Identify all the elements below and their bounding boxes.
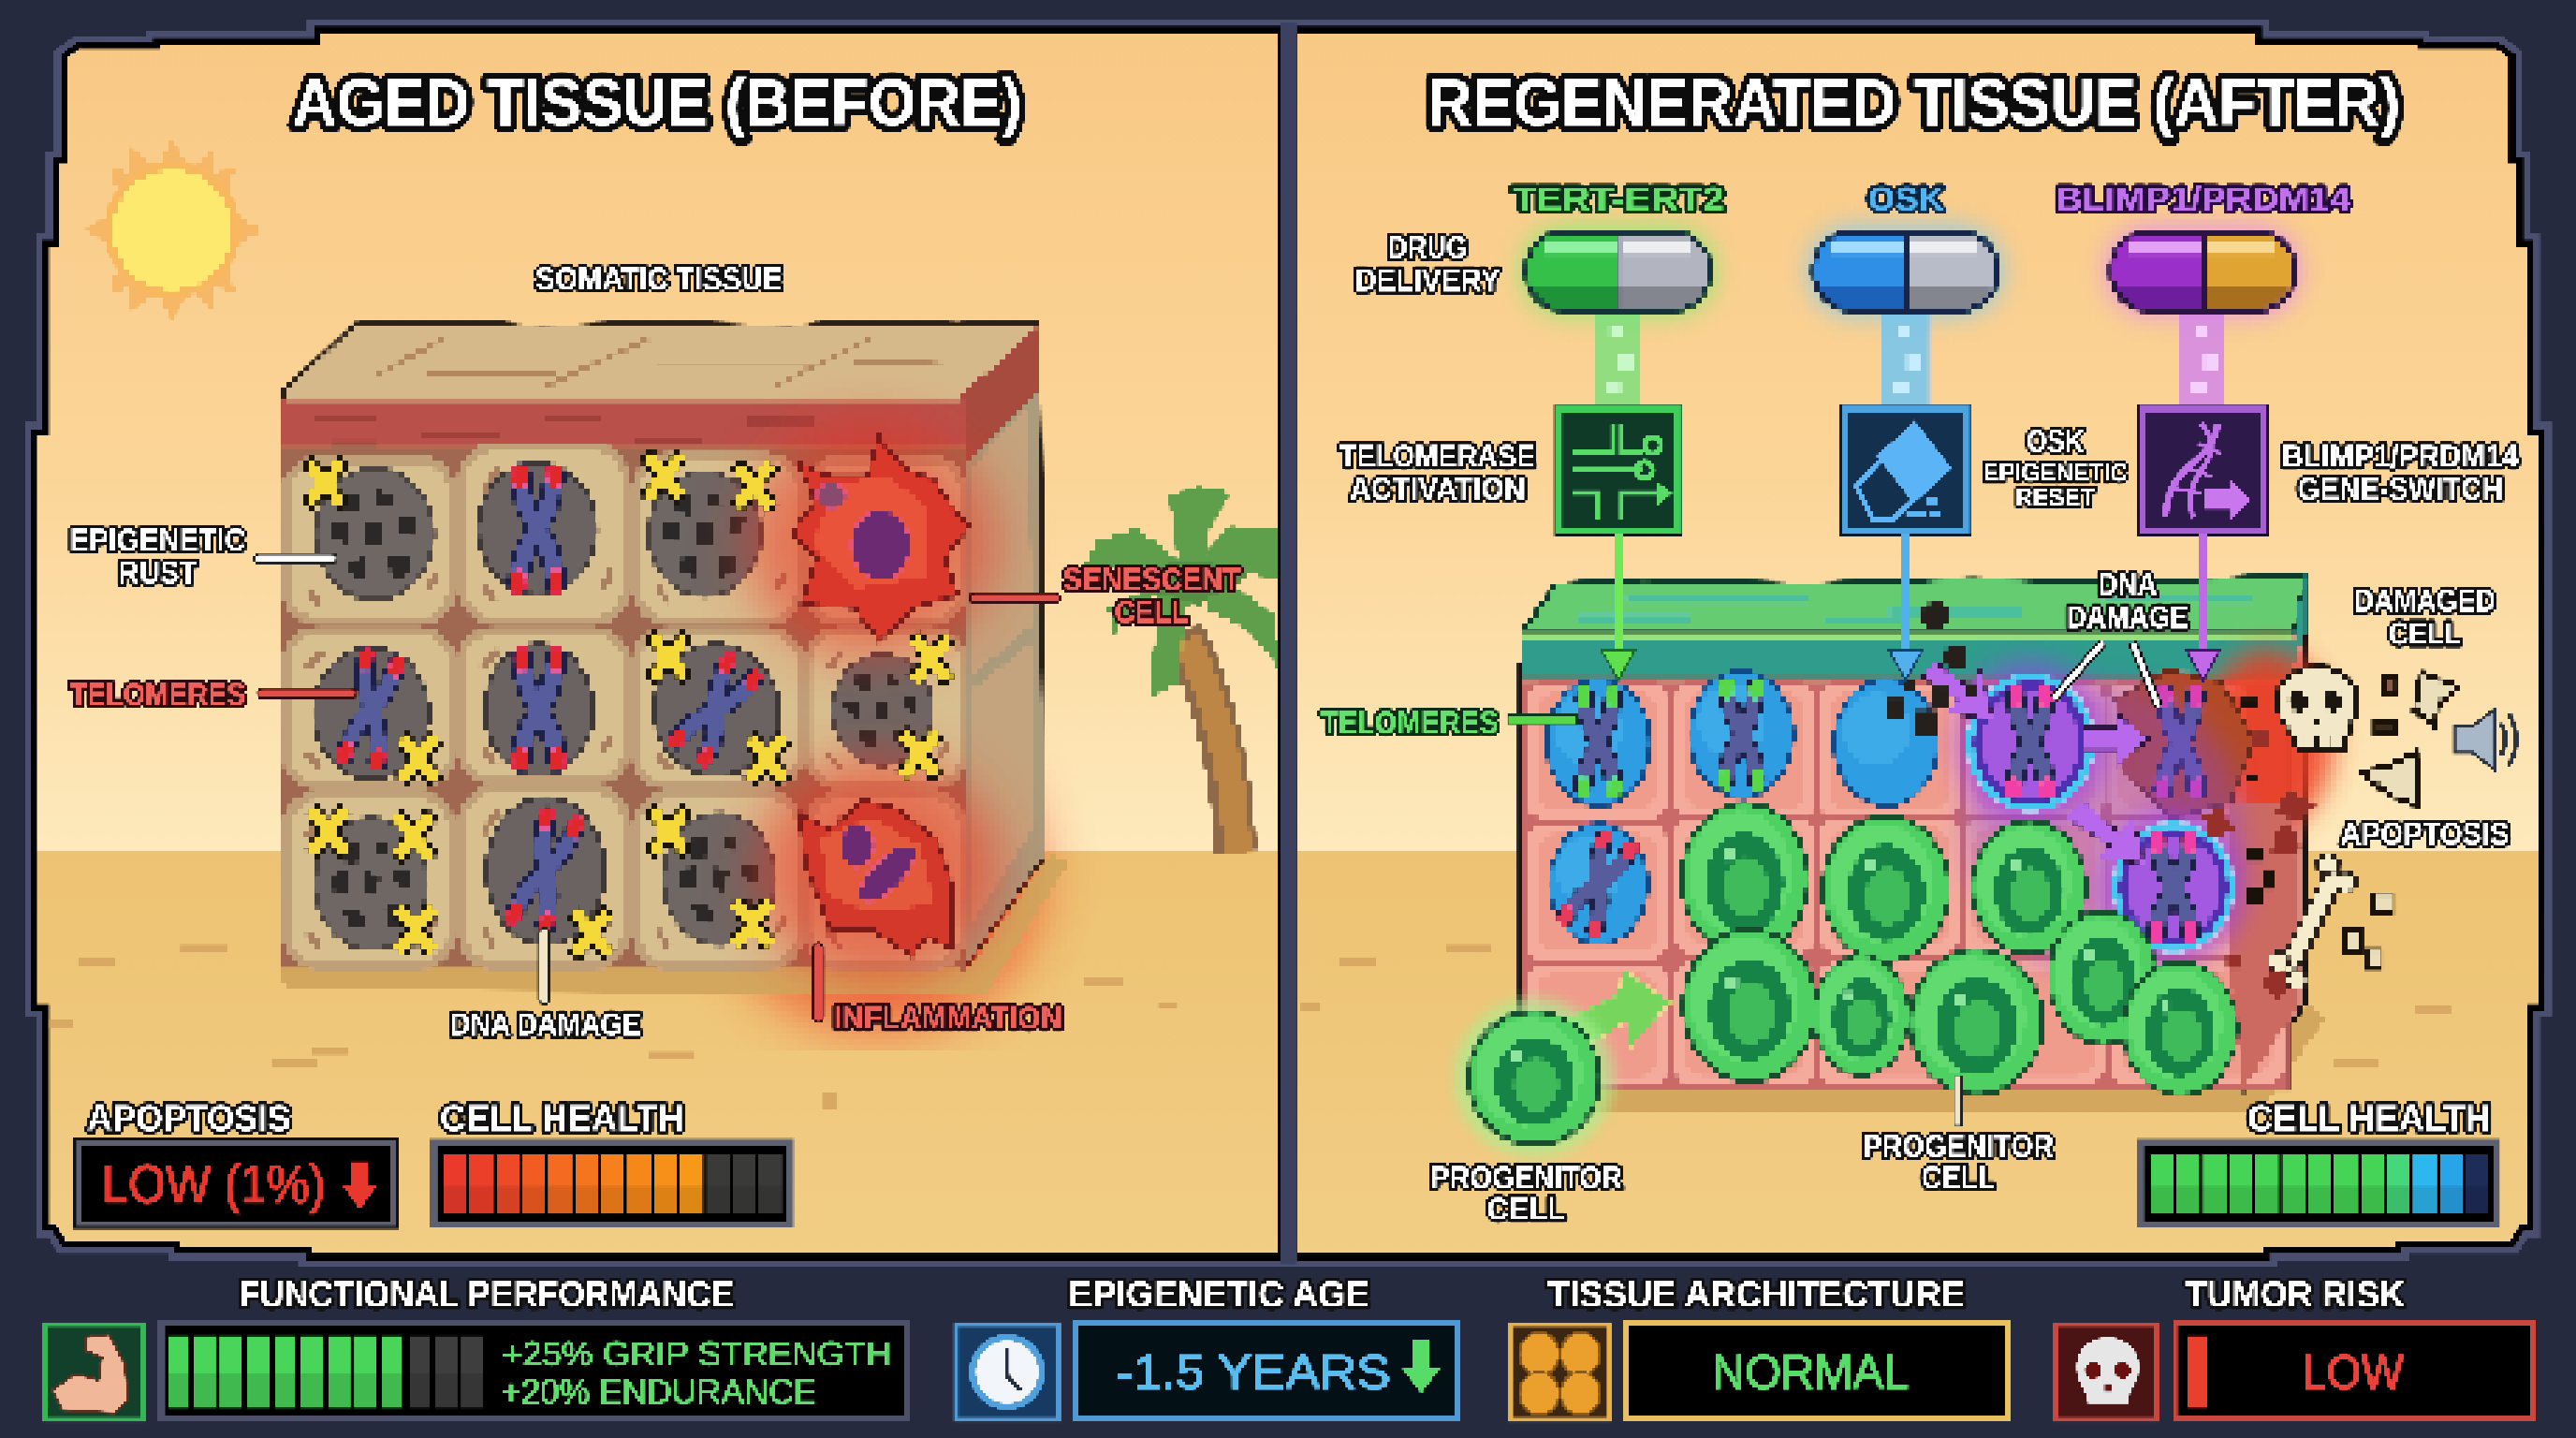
label: epigenetic rust: EPIGENETIC <box>70 523 245 558</box>
labels: damaged cell and apoptosis: CELL <box>2389 617 2461 652</box>
hud: tissue architecture: TISSUE ARCHITECTURE <box>1547 1274 1965 1314</box>
illustration: pills beams icons <box>1523 228 2298 404</box>
labels: progenitor cell: PROGENITOR <box>1430 1161 1622 1196</box>
labels: mechanisms: ACTIVATION <box>1350 473 1526 507</box>
damaged area glow <box>2202 649 2333 829</box>
label: epigenetic rust: RUST <box>118 556 198 591</box>
labels: mechanisms: BLIMP1/PRDM14 <box>2282 439 2519 474</box>
label: dna damage <box>450 929 640 1043</box>
red blob cell <box>800 800 953 956</box>
senescent cell glow <box>742 424 999 661</box>
apoptosis debris <box>2202 674 2458 1003</box>
labels: progenitor cell <box>1430 1077 2054 1226</box>
pill: green <box>1523 228 1714 314</box>
labels: damaged cell and apoptosis <box>2340 584 2510 852</box>
cell health bar: aged <box>433 1099 790 1225</box>
labels: dna damage callout <box>2054 567 2188 707</box>
icon: muscle arm <box>44 1325 143 1419</box>
labels: dna damage callout: DAMAGE <box>2067 600 2188 635</box>
icon: sun <box>84 141 261 318</box>
damage markers <box>312 460 944 949</box>
icon: skull <box>2056 1325 2157 1419</box>
ground shadow <box>1528 1005 2324 1110</box>
pink cell grid <box>1525 681 2287 1087</box>
labels: mechanisms: OSK <box>2027 425 2084 460</box>
label: telomeres: TELOMERES <box>70 678 245 712</box>
hud: tumor risk <box>2056 1274 2533 1419</box>
labels: mechanisms <box>1339 425 2519 512</box>
labels: progenitor cell: PROGENITOR <box>1863 1130 2054 1165</box>
label: somatic tissue: SOMATIC TISSUE <box>535 262 782 297</box>
label: drug delivery <box>1355 231 1500 299</box>
icon: palm tree <box>1084 487 1281 851</box>
label: epigenetic rust <box>70 523 337 591</box>
drug labels <box>1513 182 2350 218</box>
icon: eraser <box>1841 406 1969 534</box>
cell health bar: regenerated <box>2141 1099 2497 1225</box>
label: drug delivery: DELIVERY <box>1355 264 1500 299</box>
label: senescent cell: SENESCENT <box>1063 563 1240 597</box>
label: dna damage: DNA DAMAGE <box>450 1008 640 1043</box>
icon: tissue hexagons <box>1510 1325 1610 1419</box>
progenitor cell entering <box>1456 999 1614 1157</box>
arrows: gene delivery <box>1602 534 2219 681</box>
hud: functional performance: +20% ENDURANCE <box>501 1372 816 1411</box>
tissue block: aged <box>283 322 1045 986</box>
icon: speaker <box>2454 710 2516 769</box>
cell health bar: regenerated: CELL HEALTH <box>2247 1099 2491 1139</box>
divider <box>1280 23 1296 1265</box>
labels: mechanisms: GENE-SWITCH <box>2298 473 2503 507</box>
debris <box>1886 601 1978 736</box>
hud: epigenetic age: EPIGENETIC AGE <box>1069 1274 1369 1314</box>
drug labels: BLIMP1/PRDM14 <box>2056 182 2350 218</box>
apoptosis readout <box>76 1099 398 1227</box>
inflammation glow <box>714 723 1043 1035</box>
icon: dna gene switch <box>2139 406 2267 534</box>
arrows: purple repair <box>1922 662 2149 864</box>
icon: skull <box>2277 668 2356 749</box>
hud: functional performance: +25% GRIP STRENGTH <box>502 1334 891 1372</box>
drug labels: OSK <box>1868 182 1944 218</box>
illustration: regenerated scene <box>1456 575 2458 1157</box>
apoptosis readout: APOPTOSIS <box>87 1099 291 1139</box>
label: telomeres <box>70 678 357 712</box>
pill: blue <box>1810 228 2001 314</box>
apoptosis readout: LOW (1%) <box>102 1155 326 1215</box>
panel: aged tissue before <box>33 30 1281 1258</box>
green progenitor cells <box>1679 800 2239 1097</box>
title: REGENERATED TISSUE (AFTER) <box>1427 65 2400 139</box>
cell grid <box>283 444 966 970</box>
labels: progenitor cell: CELL <box>1486 1192 1566 1226</box>
labels: damaged cell and apoptosis: APOPTOSIS <box>2340 817 2510 852</box>
beams <box>1595 315 2226 404</box>
label: inflammation: INFLAMMATION <box>834 1002 1062 1036</box>
labels: progenitor cell: CELL <box>1922 1161 1996 1196</box>
arrow: migration <box>1569 970 1671 1049</box>
blue cells <box>1544 668 1940 946</box>
hud: tumor risk: TUMOR RISK <box>2186 1274 2405 1314</box>
hud: epigenetic age: -1.5 YEARS <box>1117 1345 1391 1399</box>
labels: dna damage callout: DNA <box>2098 567 2157 602</box>
ground shadow <box>279 855 1068 994</box>
nuclei <box>314 463 932 949</box>
hud: epigenetic age <box>956 1274 1457 1419</box>
cell health bar: aged: CELL HEALTH <box>440 1099 683 1139</box>
panel: regenerated tissue after <box>1295 30 2543 1258</box>
label: senescent cell: CELL <box>1115 595 1189 630</box>
pill: purple <box>2108 228 2298 314</box>
drug labels: TERT-ERT2 <box>1513 182 1724 218</box>
icon: telomerase circuit <box>1556 406 1680 534</box>
title: AGED TISSUE (BEFORE) <box>292 65 1022 139</box>
tissue block: regenerated <box>1456 575 2458 1157</box>
hud: tissue architecture <box>1510 1274 2008 1419</box>
senescent cell <box>792 437 970 640</box>
label: inflammation <box>813 943 1062 1036</box>
labels: damaged cell and apoptosis: DAMAGED <box>2354 584 2496 619</box>
illustration: aged scene <box>84 141 1281 1035</box>
labels: mechanisms: EPIGENETIC <box>1983 458 2128 487</box>
label: senescent cell <box>970 563 1240 630</box>
damaged cell <box>2116 670 2254 818</box>
label: telomeres green: TELOMERES <box>1321 706 1499 741</box>
hud: tissue architecture: NORMAL <box>1712 1345 1909 1399</box>
hud: tumor risk: LOW <box>2302 1345 2404 1399</box>
purple repairing cells <box>1955 661 2246 977</box>
hud: functional performance <box>44 1274 907 1419</box>
label: drug delivery: DRUG <box>1388 231 1467 266</box>
labels: mechanisms: TELOMERASE <box>1339 439 1535 474</box>
hud: functional performance: FUNCTIONAL PERFORMANCE <box>239 1274 734 1314</box>
icon: clock <box>956 1325 1058 1419</box>
labels: mechanisms: RESET <box>2016 483 2095 512</box>
